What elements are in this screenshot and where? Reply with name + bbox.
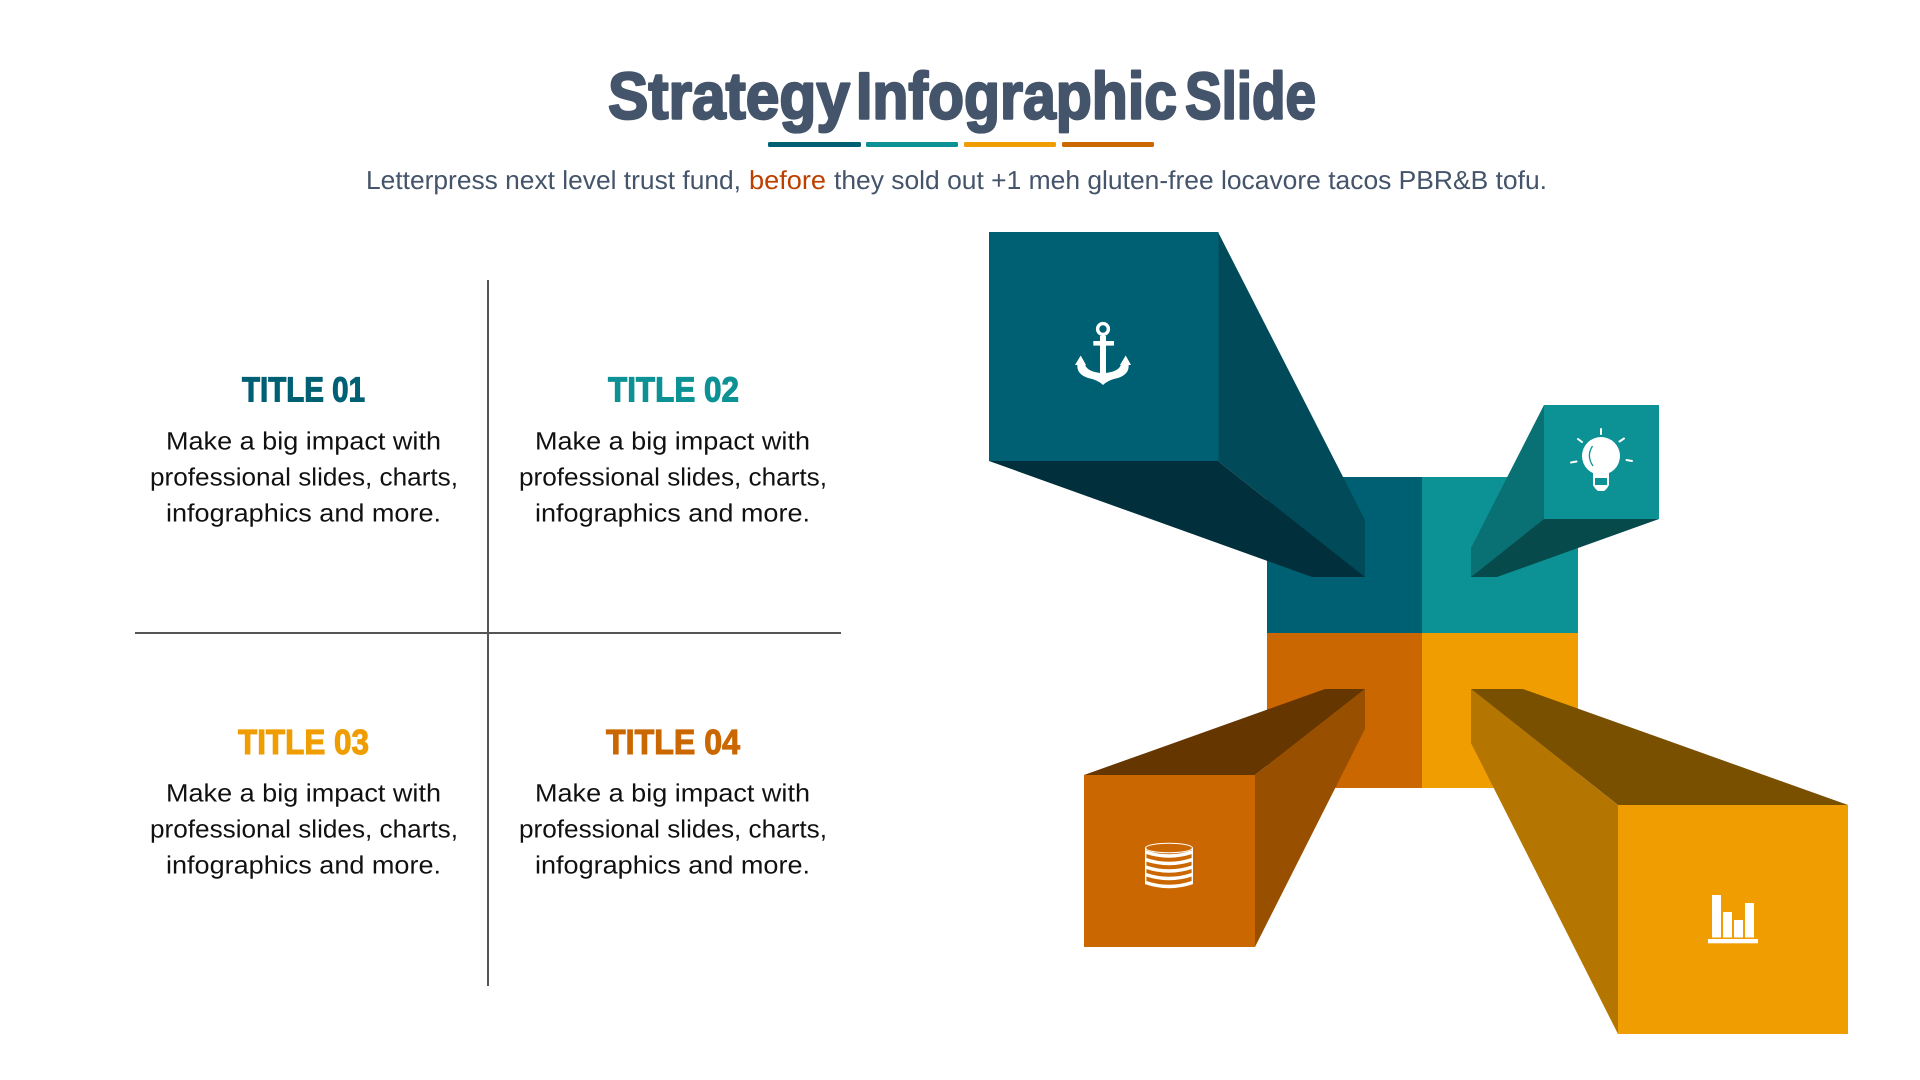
central four-colour square <box>1267 477 1578 788</box>
panel: title 04 text: Make a big impact with <box>535 780 810 808</box>
3D block: yellow <box>1471 689 1848 1034</box>
icon: anchor <box>1075 324 1131 385</box>
title: Infographic <box>856 58 1177 132</box>
icon: bar chart <box>1708 895 1758 943</box>
3D block: teal <box>1471 405 1659 577</box>
panel: title 01 text: Make a big impact with <box>166 428 441 456</box>
panel: title 03 text: professional slides, charts, <box>150 816 458 844</box>
subtitle <box>366 165 1547 195</box>
title: Strategy <box>608 58 850 132</box>
panel: title 01 text: infographics and more. <box>166 500 441 528</box>
panel: title 04 text <box>519 723 827 880</box>
icon: coin stack <box>1146 843 1192 886</box>
panel: title 02 text <box>519 370 827 528</box>
panel: title 01 text <box>150 370 458 528</box>
panel: title 04 text: professional slides, charts, <box>519 816 827 844</box>
subtitle: Letterpress next level trust fund, <box>366 165 741 195</box>
title underline bars <box>768 142 1154 147</box>
3D block: orange <box>1084 689 1365 947</box>
panel: title 03 text: Make a big impact with <box>166 780 441 808</box>
panel: title 03 text: TITLE 03 <box>238 723 369 762</box>
panel: title 01 text: TITLE 01 <box>242 370 365 410</box>
panel: title 03 text <box>150 723 458 880</box>
panel: title 01 text: professional slides, charts, <box>150 464 458 492</box>
subtitle: they sold out +1 meh gluten-free locavore tacos PBR&B tofu. <box>834 165 1547 195</box>
panel: title 02 text: professional slides, charts, <box>519 464 827 492</box>
icon: light bulb <box>1571 429 1632 491</box>
panel: title 02 text: TITLE 02 <box>608 370 739 410</box>
panel: title 04 text: TITLE 04 <box>606 723 740 762</box>
panel: title 02 text: infographics and more. <box>535 500 810 528</box>
3D block: dark teal <box>989 232 1365 577</box>
title: Slide <box>1185 58 1316 132</box>
panel: title 04 text: infographics and more. <box>535 852 810 880</box>
title <box>608 58 1316 132</box>
panel: title 02 text: Make a big impact with <box>535 428 810 456</box>
panel: title 03 text: infographics and more. <box>166 852 441 880</box>
subtitle: before <box>749 165 826 195</box>
